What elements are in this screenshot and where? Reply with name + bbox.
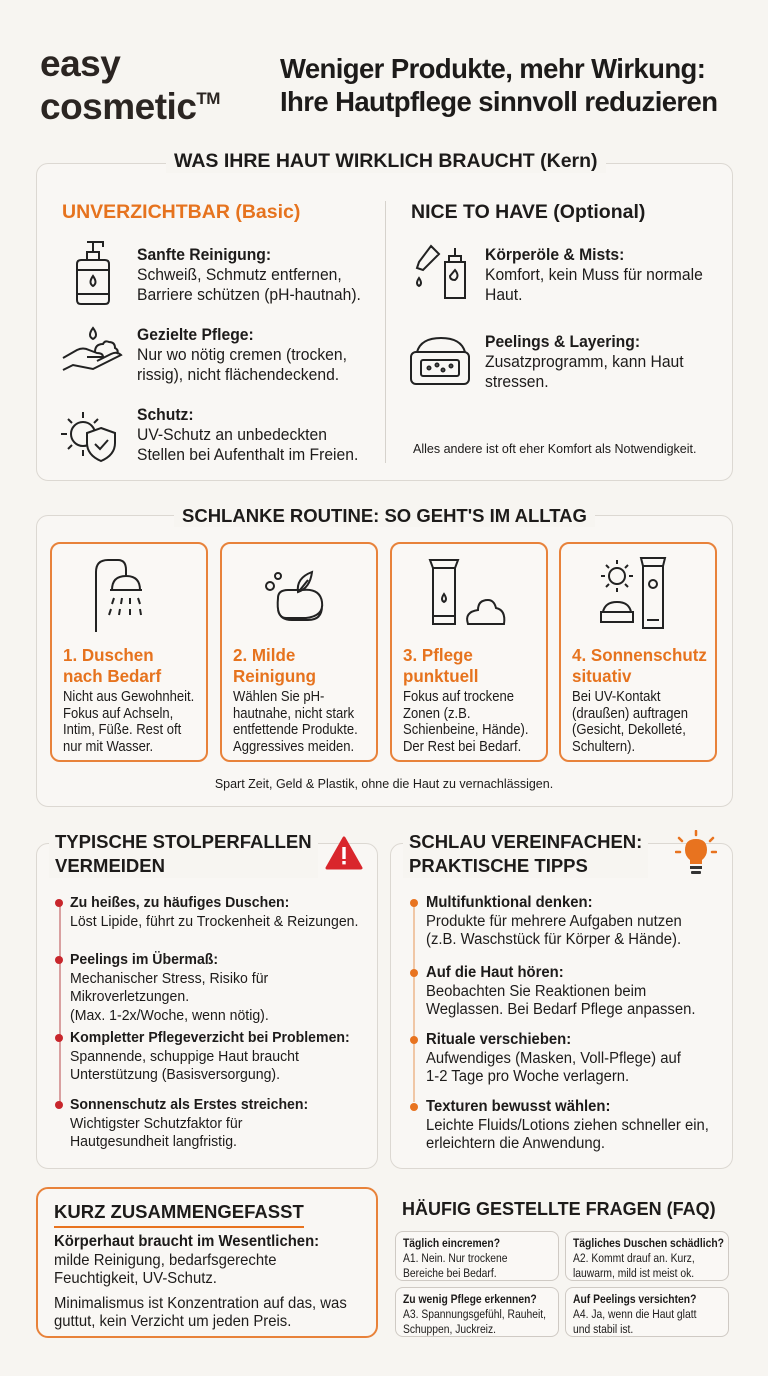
faq 3: Zu wenig Pflege erkennen?	[403, 1292, 537, 1306]
text: protection: Stellen bei Aufenthalt im Freien.	[137, 446, 358, 464]
card: spot care: Zonen (z.B.	[403, 706, 470, 722]
card: mild cleansing: hautnahe, nicht stark	[233, 706, 354, 722]
item: multifunctional: (z.B. Waschstück für Körper & Hände).	[426, 931, 681, 948]
faq 1: A1. Nein. Nur trockene	[403, 1251, 508, 1265]
card: spot care: Schienbeine, Hände).	[403, 722, 529, 738]
title: Ihre Hautpflege sinnvoll reduzieren	[280, 86, 717, 117]
card: spot care: Fokus auf trockene	[403, 689, 514, 705]
item: peelings: Mechanischer Stress, Risiko für	[70, 970, 268, 986]
heading: 3. Pflege	[403, 645, 473, 665]
text: peelings: stressen.	[485, 373, 549, 391]
logo	[40, 43, 220, 127]
item: no care: Kompletter Pflegeverzicht bei Problemen:	[70, 1029, 350, 1046]
card: mild cleansing: Aggressives meiden.	[233, 738, 354, 754]
text: body oils	[485, 246, 703, 304]
item: listen: Auf die Haut hören:	[426, 964, 564, 981]
faq 4: A4. Ja, wenn die Haut glatt	[573, 1307, 696, 1321]
panel: tips	[390, 843, 733, 1169]
text: protection	[137, 406, 358, 464]
item: hot showers	[55, 894, 358, 930]
item: rituals: Rituale verschieben:	[426, 1031, 571, 1048]
text: summary: Körperhaut braucht im Wesentlichen:	[54, 1233, 319, 1250]
heading: pitfalls: TYPISCHE STOLPERFALLEN	[55, 831, 312, 852]
text: body oils: Haut.	[485, 286, 522, 304]
heading: nach Bedarf	[63, 666, 161, 686]
text: summary: milde Reinigung, bedarfsgerechte	[54, 1252, 277, 1268]
text: summary: guttut, kein Verzicht um jeden Preis.	[54, 1313, 291, 1330]
card: sunscreen	[559, 542, 717, 762]
card: shower: Fokus auf Achseln,	[63, 706, 173, 722]
faq 2: Tägliches Duschen schädlich?	[573, 1236, 724, 1250]
text: summary	[54, 1233, 347, 1330]
faq 2: A2. Kommt drauf an. Kurz,	[573, 1251, 695, 1265]
item: hot showers: Zu heißes, zu häufiges Duschen:	[70, 894, 289, 911]
text: gentle cleansing	[137, 246, 361, 304]
footnote: Alles andere ist oft eher Komfort als Notwendigkeit.	[413, 442, 696, 456]
item: hot showers: Löst Lipide, führt zu Trockenheit & Reizungen.	[70, 912, 358, 930]
card: sunscreen: Bei UV-Kontakt	[572, 689, 660, 705]
heading: tips: PRAKTISCHE TIPPS	[409, 855, 588, 876]
icon: light bulb	[675, 830, 717, 874]
card: mild cleansing: Wählen Sie pH-	[233, 689, 324, 705]
text: gentle cleansing: Sanfte Reinigung:	[137, 246, 271, 264]
item: listen: Weglassen. Bei Bedarf Pflege anpassen.	[426, 1001, 695, 1018]
item: skip sunscreen: Hautgesundheit langfristig.	[70, 1133, 237, 1150]
text: protection: Schutz:	[137, 406, 194, 424]
heading: 2. Milde	[233, 645, 295, 665]
item: listen: Beobachten Sie Reaktionen beim	[426, 982, 646, 1000]
item: multifunctional: Produkte für mehrere Aufgaben nutzen	[426, 912, 682, 930]
heading: 4. Sonnenschutz	[572, 645, 707, 665]
item: no care	[55, 1029, 350, 1083]
heading: Reinigung	[233, 666, 316, 686]
card: shower	[50, 542, 208, 762]
card: shower: nur mit Wasser.	[63, 738, 153, 754]
card: spot care	[390, 542, 548, 762]
item: rituals: Aufwendiges (Masken, Voll-Pflege) auf	[426, 1050, 681, 1066]
heading: pitfalls: VERMEIDEN	[55, 855, 165, 876]
panel: lean routine	[36, 515, 733, 807]
faq 4: und stabil ist.	[573, 1322, 633, 1336]
icon: warning	[326, 836, 363, 870]
card: sunscreen: (Gesicht, Dekolleté,	[572, 722, 686, 738]
faq 1: Täglich eincremen?	[403, 1236, 500, 1250]
item: peelings: (Max. 1-2x/Woche, wenn nötig).	[70, 1006, 269, 1024]
item: no care: Spannende, schuppige Haut braucht	[70, 1048, 299, 1064]
icon: hand cream	[62, 326, 123, 371]
icon: sun shield	[61, 412, 116, 462]
panel: summary	[36, 1187, 378, 1338]
item: peelings: Mikroverletzungen.	[70, 988, 189, 1005]
heading: tips: SCHLAU VEREINFACHEN:	[409, 831, 642, 852]
heading: FAQ: HÄUFIG GESTELLTE FRAGEN (FAQ)	[402, 1199, 716, 1219]
heading: basic: UNVERZICHTBAR (Basic)	[62, 201, 300, 223]
heading: core: WAS IHRE HAUT WIRKLICH BRAUCHT (Kern)	[174, 150, 598, 172]
faq 3: A3. Spannungsgefühl, Rauheit,	[403, 1307, 546, 1321]
text: body oils: Komfort, kein Muss für normale	[485, 266, 703, 284]
title: Weniger Produkte, mehr Wirkung:	[280, 53, 705, 84]
text: summary: Feuchtigkeit, UV-Schutz. Minimalismus ist Konzentration auf das, was	[54, 1270, 347, 1312]
title	[280, 53, 717, 117]
heading: punktuell	[403, 666, 478, 686]
heading	[403, 645, 478, 686]
text: targeted care: Nur wo nötig cremen (trocken,	[137, 346, 347, 364]
logo: easy	[40, 43, 120, 84]
heading: summary: KURZ ZUSAMMENGEFASST	[54, 1201, 304, 1222]
heading: routine: SCHLANKE ROUTINE: SO GEHT'S IM ALLTAG	[182, 505, 587, 526]
icon: scrub jar	[410, 337, 470, 385]
heading: nice to have: NICE TO HAVE (Optional)	[411, 201, 645, 223]
item: textures: Texturen bewusst wählen:	[426, 1098, 610, 1115]
text: gentle cleansing: Schweiß, Schmutz entfernen,	[137, 266, 342, 284]
heading	[63, 645, 162, 686]
card: spot care: Der Rest bei Bedarf.	[403, 738, 521, 754]
item: textures	[410, 1098, 709, 1152]
card: sunscreen: (draußen) auftragen	[572, 706, 688, 722]
item: skip sunscreen: Sonnenschutz als Erstes streichen:	[70, 1096, 308, 1113]
faq 1	[395, 1231, 559, 1281]
text: targeted care: Gezielte Pflege:	[137, 326, 254, 344]
card: mild cleansing: entfettende Produkte.	[233, 722, 358, 738]
item: listen	[410, 964, 695, 1018]
text: peelings: Zusatzprogramm, kann Haut	[485, 353, 684, 371]
faq 1: Bereiche bei Bedarf.	[403, 1266, 497, 1280]
heading	[233, 645, 316, 686]
card: sunscreen: Schultern).	[572, 738, 635, 754]
logo: cosmeticTM	[40, 86, 220, 127]
text: targeted care	[137, 326, 347, 384]
icon: pump bottle	[76, 241, 110, 305]
heading	[572, 645, 707, 686]
item: peelings	[55, 951, 269, 1024]
card: mild cleansing	[220, 542, 378, 762]
faq 4: Auf Peelings versichten?	[573, 1292, 696, 1306]
faq 3	[395, 1287, 559, 1337]
item: multifunctional	[410, 894, 682, 948]
item: no care: Unterstützung (Basisversorgung).	[70, 1066, 280, 1083]
heading: pitfalls	[49, 830, 318, 878]
item: textures: Leichte Fluids/Lotions ziehen schneller ein,	[426, 1116, 709, 1134]
item: multifunctional: Multifunktional denken:	[426, 894, 593, 911]
faq 2	[565, 1231, 729, 1281]
faq 3: Schuppen, Juckreiz.	[403, 1322, 496, 1336]
item: peelings: Peelings im Übermaß:	[70, 951, 218, 968]
card: shower: Intim, Füße. Rest oft	[63, 722, 181, 738]
text: peelings: Peelings & Layering:	[485, 333, 640, 351]
faq 2: lauwarm, mild ist meist ok.	[573, 1266, 694, 1280]
footer note: Spart Zeit, Geld & Plastik, ohne die Haut zu vernachlässigen.	[215, 777, 553, 791]
icon: dropper	[416, 244, 466, 299]
heading: situativ	[572, 666, 631, 686]
text: protection: UV-Schutz an unbedeckten	[137, 426, 327, 444]
card: shower: Nicht aus Gewohnheit.	[63, 689, 194, 705]
faq 4	[565, 1287, 729, 1337]
item: rituals	[410, 1031, 681, 1085]
item: rituals: 1-2 Tage pro Woche verlagern.	[426, 1068, 629, 1085]
text: targeted care: rissig), nicht flächendeckend.	[137, 366, 339, 384]
text: peelings	[485, 333, 684, 391]
item: skip sunscreen	[55, 1096, 308, 1150]
heading: 1. Duschen	[63, 645, 154, 665]
text: body oils: Körperöle & Mists:	[485, 246, 624, 264]
heading: tips	[403, 830, 648, 878]
item: skip sunscreen: Wichtigster Schutzfaktor für	[70, 1114, 242, 1132]
panel: pitfalls	[36, 843, 378, 1169]
text: gentle cleansing: Barriere schützen (pH-hautnah).	[137, 286, 361, 304]
item: textures: erleichtern die Anwendung.	[426, 1135, 605, 1152]
panel: core needs	[36, 163, 733, 481]
